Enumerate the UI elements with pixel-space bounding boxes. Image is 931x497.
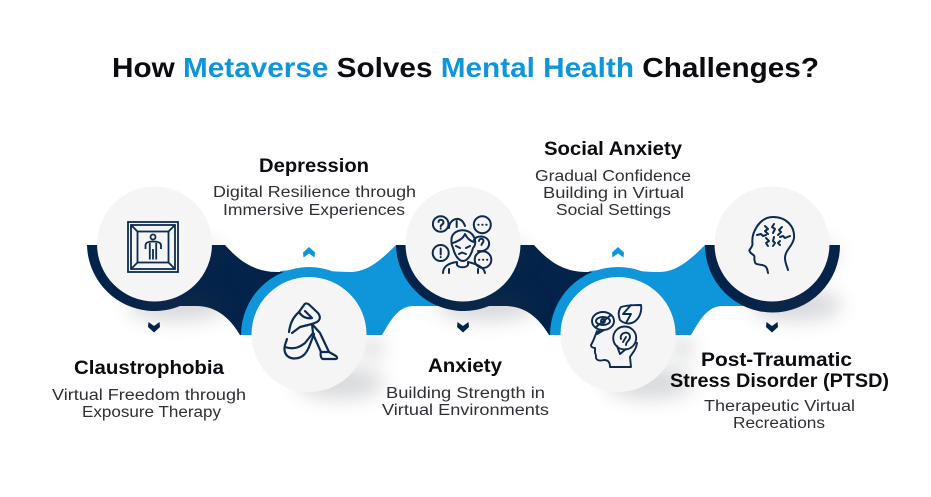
- text: anxiety: [382, 355, 549, 419]
- shadow under ribbon and circles: [128, 244, 842, 398]
- text: anxiety: Anxiety: [428, 355, 502, 377]
- text: depression: [213, 155, 416, 219]
- text: depression: Digital Resilience through: [213, 184, 416, 201]
- text: depression: Immersive Experiences: [223, 202, 405, 219]
- icon: head with eye, ear and speech symbols: [591, 305, 641, 367]
- text: PTSD: [670, 349, 889, 432]
- blue ring: second step: [241, 267, 377, 335]
- circle 1: claustrophobia: [97, 186, 212, 302]
- dark end ring: [705, 245, 840, 312]
- wave ribbon: [87, 245, 840, 335]
- text: social anxiety: Social Anxiety: [544, 138, 682, 160]
- blue ribbon segment 2: [589, 245, 749, 335]
- icon: anxious person with speech bubbles: [433, 216, 491, 273]
- icon: head with stress waves: [749, 217, 794, 273]
- text: claustrophobia: Claustrophobia: [74, 357, 224, 379]
- blue ring: fourth step: [550, 267, 686, 335]
- title: How Metaverse Solves Mental Health Challenges?: [112, 52, 819, 83]
- text: claustrophobia: Virtual Freedom through: [52, 387, 246, 404]
- circle 4: social anxiety: [560, 277, 676, 392]
- text: social anxiety: Social Settings: [556, 202, 671, 219]
- dark ribbon segment 2: [396, 245, 609, 335]
- circle 3: anxiety: [406, 186, 520, 302]
- circle 2: depression: [252, 277, 366, 392]
- text: depression: Depression: [259, 155, 369, 177]
- chevron: social anxiety: [612, 247, 624, 258]
- blue ribbon segment 1: [280, 245, 440, 335]
- chevron: anxiety: [457, 322, 469, 332]
- text: PTSD: Therapeutic Virtual: [704, 398, 855, 415]
- text: claustrophobia: [52, 357, 246, 421]
- text: anxiety: Virtual Environments: [382, 402, 549, 419]
- icon: person sitting with head on knees: [284, 303, 337, 359]
- chevron: claustrophobia: [148, 322, 160, 332]
- text: anxiety: Building Strength in: [386, 385, 545, 402]
- icon: elevator box with person: [128, 222, 178, 272]
- text: PTSD: Stress Disorder (PTSD): [670, 370, 889, 392]
- text: PTSD: Post-Traumatic: [701, 349, 852, 371]
- text: claustrophobia: Exposure Therapy: [82, 404, 221, 421]
- dark ribbon segment 1: [87, 245, 300, 335]
- text: social anxiety: Building in Virtual: [543, 185, 684, 202]
- text: social anxiety: Gradual Confidence: [535, 168, 691, 185]
- text: PTSD: Recreations: [733, 415, 825, 432]
- text: social anxiety: [535, 138, 691, 219]
- chevron: depression: [303, 247, 315, 258]
- circle 5: PTSD: [714, 186, 830, 302]
- chevron: PTSD: [766, 322, 778, 332]
